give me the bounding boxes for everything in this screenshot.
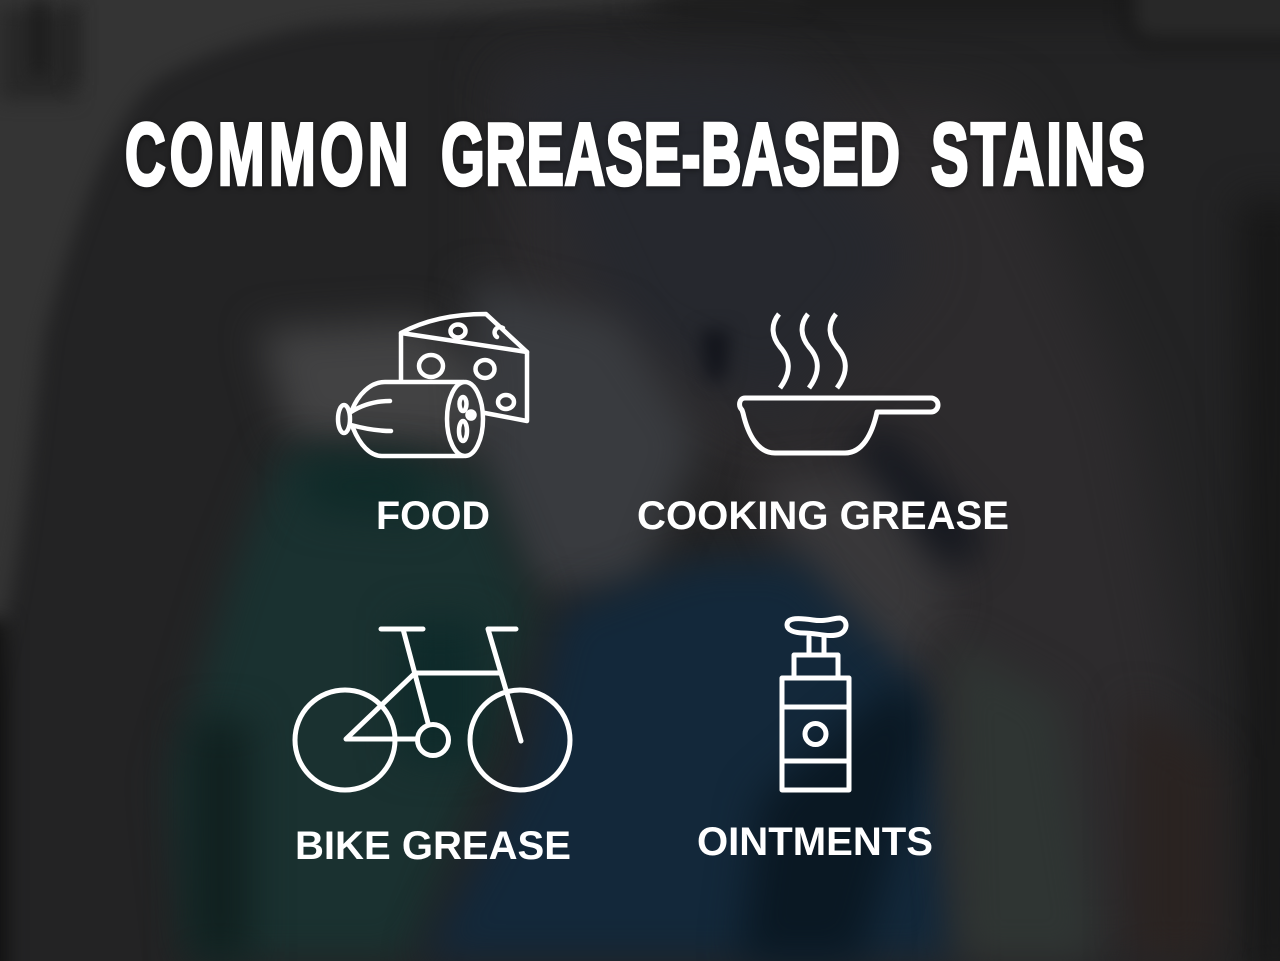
label: bike grease: BIKE GREASE: [295, 824, 571, 868]
title: GREASE-BASED: [441, 105, 900, 204]
icon: steaming pan: [740, 314, 938, 453]
title: COMMON: [125, 105, 409, 204]
label: ointments: OINTMENTS: [697, 820, 933, 864]
icon: bicycle: [295, 629, 570, 790]
icon: cheese and sausage: [338, 314, 527, 456]
label: cooking grease: COOKING GREASE: [637, 494, 1009, 538]
label: food: FOOD: [376, 494, 490, 538]
icon: ointment pump bottle: [782, 618, 849, 790]
title: STAINS: [931, 105, 1145, 204]
title: [125, 105, 1145, 204]
